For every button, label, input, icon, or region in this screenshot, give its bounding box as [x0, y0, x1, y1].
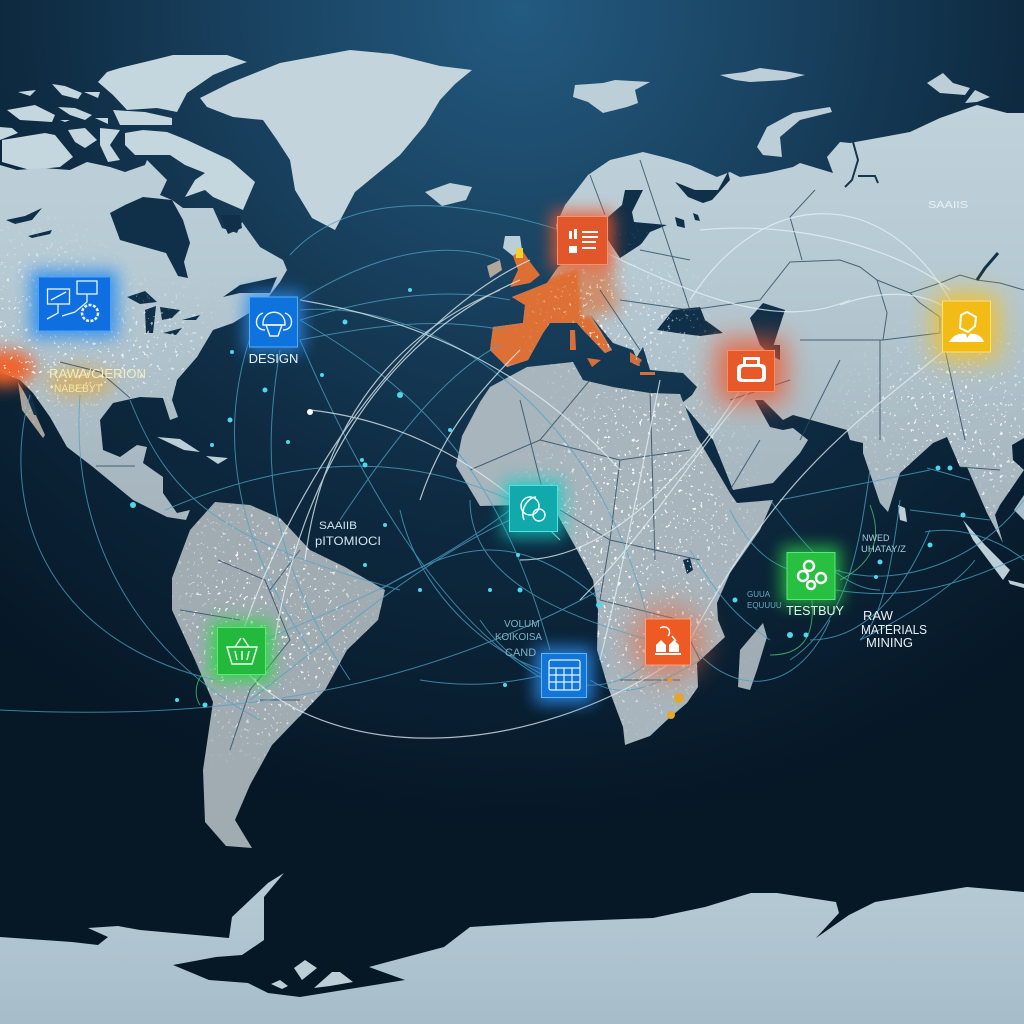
- label: small east africa: GUUA: [747, 590, 771, 599]
- Great Slave and Bear lakes: [6, 208, 52, 238]
- network arcs: [0, 206, 1024, 738]
- landmass: South America: [172, 502, 385, 848]
- landmass: Africa: [456, 362, 773, 745]
- label: raw materials mining: MINING: [866, 635, 913, 650]
- Persian Gulf corner: [760, 345, 780, 360]
- label: DESIGN: DESIGN: [249, 351, 298, 366]
- country borders: [60, 160, 1024, 750]
- label: raw materials mining: RAW: [863, 608, 894, 623]
- Ungava Bay: [220, 215, 242, 234]
- callout: South America basket: [211, 621, 272, 681]
- bright white arcs: [240, 214, 950, 738]
- green arcs: [196, 505, 876, 705]
- Siberian rivers: [845, 142, 878, 187]
- label: nwed uhatay: NWED: [862, 533, 890, 543]
- callout: China: [935, 294, 998, 359]
- landmass: North America: [0, 160, 287, 520]
- callout: West Africa: [503, 479, 564, 538]
- yellow UK marker: [516, 248, 523, 258]
- Russian lakes: [675, 213, 700, 228]
- label: volum koikoisa cand: VOLUM: [504, 619, 540, 630]
- faint blue arcs: [0, 206, 1024, 720]
- Baja gulf: [24, 390, 38, 415]
- bright settlement speckle: [0, 215, 1024, 770]
- callout: Middle East: [716, 339, 786, 403]
- landmass: Antarctica: [0, 873, 1024, 1024]
- orange Balkans highlights: [630, 352, 642, 366]
- callout: Southern Africa: [630, 604, 706, 680]
- callout: Atlantic calendar: [535, 647, 593, 704]
- label: nabebyt: NABEBYT: [54, 383, 102, 395]
- callout: design: [245, 292, 303, 366]
- Mediterranean islands: [570, 330, 655, 375]
- orange California glow: [0, 350, 35, 386]
- callout: analytics (North America): [30, 270, 118, 338]
- landmass: Arctic archipelago: [0, 55, 255, 210]
- label: pitomioci: pITOMIOCI: [315, 534, 381, 548]
- islands: [157, 68, 1024, 989]
- label: saaiib: SAAIIB: [319, 520, 357, 532]
- Lake Victoria: [683, 558, 693, 574]
- Baltic sea: [608, 190, 667, 258]
- label: volum koikoisa cand: KOIKOISA: [495, 632, 542, 643]
- label: raw materials mining: MATERIALS: [861, 622, 927, 637]
- network nodes: [130, 288, 966, 708]
- landmass: Madagascar: [738, 623, 767, 690]
- label: saaiis: SAAIIS: [928, 199, 968, 211]
- link glyph: [660, 627, 676, 641]
- settlement speckle: [0, 215, 1024, 770]
- callout: Europe: [552, 211, 613, 269]
- landmass: Eurasia: [490, 105, 1024, 543]
- label: nwed uhatay: UHATAY/Z: [861, 544, 907, 554]
- gold dots South Africa: [667, 678, 684, 719]
- landmass: Baja California: [18, 382, 45, 438]
- callout: East Africa: [781, 546, 844, 618]
- White Sea: [675, 172, 730, 203]
- landmass: Greenland: [200, 50, 472, 230]
- text labels: [49, 199, 968, 659]
- yellow label glow: [46, 366, 114, 398]
- Great Lakes: [127, 277, 277, 335]
- label: volum koikoisa cand: CAND: [505, 647, 536, 659]
- orange Britain: [510, 250, 540, 287]
- Hudson Bay: [110, 197, 190, 278]
- Black Sea: [657, 307, 723, 336]
- label: small east africa: EQUUUU: [747, 601, 782, 610]
- label: raw/cierion: RAWA/CIERION: [49, 367, 146, 381]
- Lake Baikal: [977, 253, 998, 280]
- Caspian Sea: [750, 303, 785, 350]
- orange Europe highlight: [484, 262, 620, 370]
- water cut-outs: [6, 172, 785, 574]
- label: TESTBUY: TESTBUY: [786, 604, 844, 618]
